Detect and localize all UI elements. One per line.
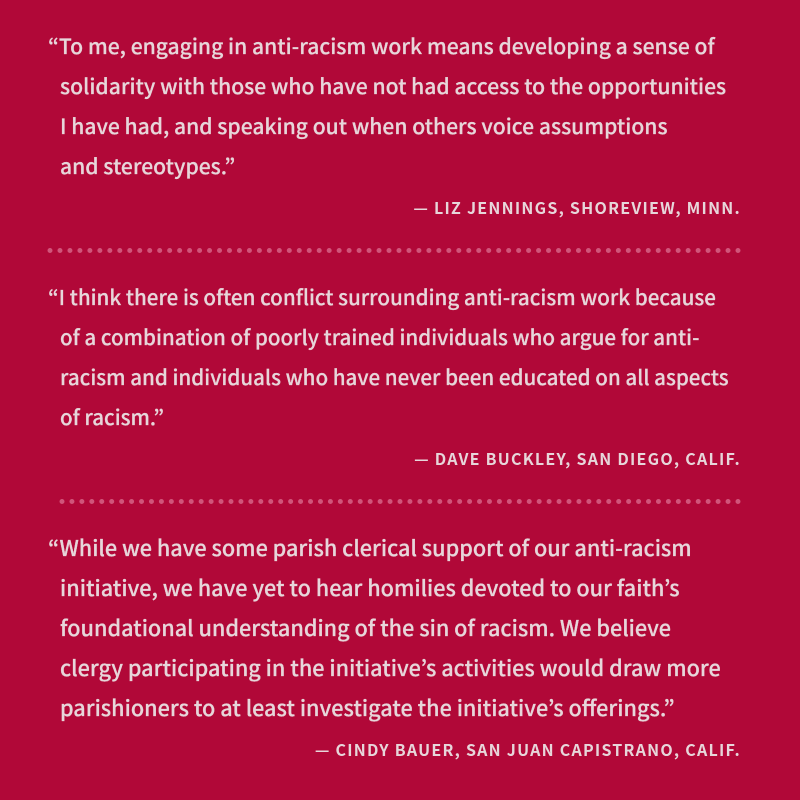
quote: Liz Jennings: and stereotypes.” (60, 151, 235, 181)
quote: Cindy Bauer: parishioners to at least investigate the initiative’s offerings.” (60, 692, 675, 723)
quote: Liz Jennings: “To me, engaging in anti-racism work means developing a sense of (48, 31, 715, 61)
quote: Cindy Bauer: — CINDY BAUER, SAN JUAN CAPISTRANO, CALIF. (315, 737, 741, 761)
quote: Dave Buckley: racism and individuals who have never been educated on all aspects (60, 361, 729, 391)
quote: Liz Jennings: solidarity with those who have not had access to the opportunities (60, 71, 726, 101)
quote: Dave Buckley: of racism.” (60, 401, 164, 431)
quote: Dave Buckley: of a combination of poorly trained individuals who argue for anti- (60, 321, 699, 351)
quote: Cindy Bauer: clergy participating in the initiative’s activities would draw more (60, 652, 721, 683)
quote: Liz Jennings: — LIZ JENNINGS, SHOREVIEW, MINN. (413, 195, 741, 219)
quote: Liz Jennings (48, 31, 741, 219)
quote: Dave Buckley: — DAVE BUCKLEY, SAN DIEGO, CALIF. (414, 446, 741, 470)
divider: dotted line 2 (60, 499, 740, 504)
quote: Cindy Bauer (48, 532, 741, 761)
quote: Cindy Bauer: initiative, we have yet to hear homilies devoted to our faith’s (60, 572, 680, 603)
quote: Cindy Bauer: foundational understanding of the sin of racism. We believe (60, 612, 671, 643)
divider: dotted line 1 (48, 248, 740, 253)
quote: Liz Jennings: I have had, and speaking out when others voice assumptions (60, 111, 668, 141)
quote: Cindy Bauer: “While we have some parish clerical support of our anti-racism (48, 532, 692, 563)
quote: Dave Buckley: “I think there is often conflict surrounding anti-racism work because (48, 281, 716, 311)
quote: Dave Buckley (48, 281, 741, 470)
